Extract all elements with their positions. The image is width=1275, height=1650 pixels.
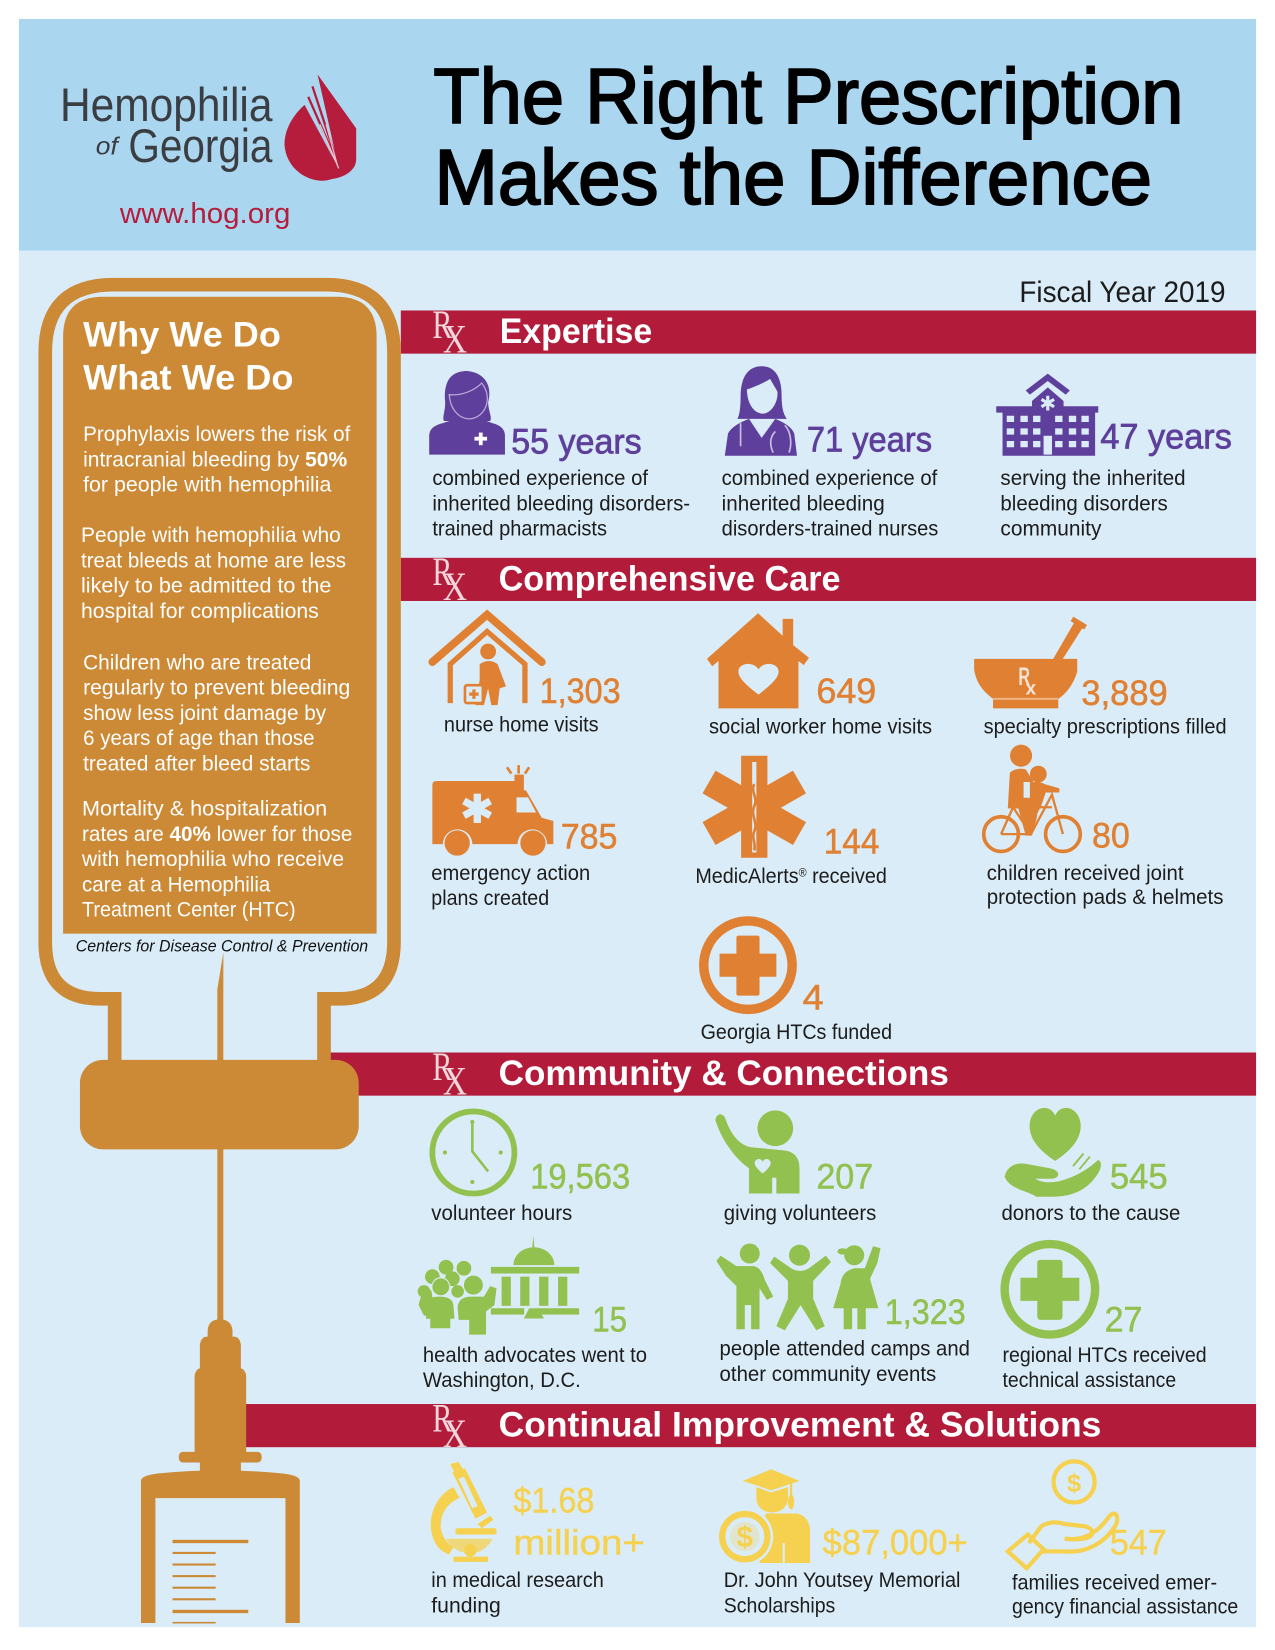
fact: mortality: with hemophilia who receive [81, 848, 344, 871]
section heading: Continual Improvement & Solutions: X [443, 1411, 467, 1456]
fact: prophylaxis: Prophylaxis lowers the risk of [83, 423, 350, 446]
description: volunteer hours [431, 1202, 572, 1225]
section heading: Expertise: Expertise [500, 313, 652, 351]
icon: hand receiving coin: $ [1067, 1469, 1081, 1497]
panel: community and connections [322, 1044, 1256, 1392]
fact: children: Children who are treated [83, 651, 311, 674]
description: social worker home visits [709, 716, 932, 739]
number: 27: 27 [1105, 1301, 1142, 1339]
stat: regional HTCs [1003, 1244, 1207, 1392]
description [431, 1569, 604, 1617]
icon: three children [716, 1244, 881, 1330]
title: Makes the Difference [434, 135, 1152, 221]
description: regional HTCs received [1003, 1344, 1207, 1367]
description: trained pharmacists [432, 518, 607, 541]
description: protection pads & helmets [987, 886, 1223, 909]
panel background [63, 297, 377, 934]
stat: medical research funding [431, 1462, 645, 1617]
description: Scholarships [724, 1594, 835, 1617]
number: $1.68 million+ [513, 1482, 645, 1563]
stat: memorial scholarships [716, 1469, 968, 1617]
description [987, 862, 1223, 909]
fact: mortality: rates are 40% lower for those [82, 823, 352, 846]
description: people attended camps and [720, 1338, 970, 1361]
stat: 71 years nurses [722, 366, 938, 541]
description: funding [431, 1594, 501, 1617]
description: combined experience of [722, 467, 937, 490]
icon: microscope [431, 1462, 497, 1562]
source credit: Centers for Disease Control & Prevention [76, 937, 368, 955]
section heading: Expertise: X [443, 317, 467, 362]
description: combined experience of [432, 467, 648, 490]
fact: mortality: Mortality & hospitalization [82, 798, 327, 821]
fact: children: 6 years of age than those [83, 727, 315, 750]
number: 15: 15 [592, 1301, 627, 1339]
icon: mortar and pestle [974, 619, 1086, 708]
icon: mortar and pestle: x [1026, 679, 1037, 700]
stat: nurse home visits [432, 615, 621, 736]
description: health advocates went to [423, 1344, 647, 1367]
section heading: Continual Improvement & Solutions: Continual Improvement & Solutions [499, 1407, 1101, 1445]
number: 71 years: 71 years [807, 422, 932, 460]
icon: medical cross in circle [704, 921, 792, 1009]
fact: prophylaxis: for people with hemophilia [83, 474, 332, 497]
description: inherited bleeding [722, 492, 885, 515]
description: serving the inherited [1000, 467, 1186, 490]
icon: nurse at home [432, 615, 542, 705]
syringe scale marks [173, 1540, 248, 1623]
icon: heart in hand [1005, 1108, 1101, 1197]
stat: joint protection pads and helmets [984, 745, 1223, 909]
stat: social worker home visits [707, 613, 932, 739]
icon: pharmacist [429, 371, 505, 455]
stat: camps and community events [716, 1244, 970, 1386]
section heading: Comprehensive Care [401, 549, 1256, 609]
panel: comprehensive care [401, 549, 1256, 1044]
description: disorders-trained nurses [722, 518, 938, 541]
description: technical assistance [1003, 1369, 1176, 1392]
description: donors to the cause [1001, 1202, 1180, 1225]
stat: specialty prescriptions [974, 619, 1227, 739]
panel: expertise [401, 302, 1256, 541]
number: $87,000+: $87,000+ [823, 1525, 968, 1563]
fiscal year label: Fiscal Year 2019 [1019, 276, 1226, 309]
description: Washington, D.C. [423, 1369, 581, 1392]
number: 547: 547 [1110, 1525, 1167, 1563]
logo: Hemophilia of Georgia: Georgia [128, 120, 273, 173]
description: ® [799, 868, 807, 880]
description: families received emer- [1012, 1571, 1217, 1594]
icon: volunteer raising hand [715, 1110, 800, 1194]
fact: children: show less joint damage by [83, 702, 327, 725]
stat: volunteer hours [431, 1111, 630, 1225]
number: 80: 80 [1092, 817, 1130, 855]
icon: clock [432, 1111, 514, 1194]
description [423, 1344, 647, 1392]
number: $1.68 million+: $1.68 [513, 1482, 594, 1520]
needle tube [217, 953, 223, 1321]
section heading: Expertise [401, 302, 1256, 362]
fact: children: treated after bleed starts [83, 752, 310, 775]
stat: Georgia HTCs funded [701, 921, 892, 1044]
logo: Hemophilia of Georgia: of [96, 133, 121, 161]
fact: prophylaxis [83, 423, 350, 497]
description: Georgia HTCs funded [701, 1021, 892, 1044]
section heading: Comprehensive Care: X [443, 564, 467, 609]
stat: giving volunteers [715, 1110, 876, 1225]
panel: continual improvement and solutions [242, 1395, 1256, 1618]
stat: donors to the cause [1001, 1108, 1180, 1225]
description [431, 862, 590, 910]
fact: home treatment: hospital for complications [81, 600, 319, 623]
icon: graduate with coin: $ [737, 1521, 753, 1554]
title: The Right Prescription [433, 54, 1183, 140]
number: $1.68 million+: million+ [513, 1525, 645, 1563]
IV bag outline [45, 285, 394, 1065]
description: community [1000, 518, 1102, 541]
description: plans created [431, 887, 549, 910]
fact: home treatment: likely to be admitted to the [81, 575, 331, 598]
icon: house with heart [707, 613, 809, 708]
description: children received joint [987, 862, 1184, 885]
section heading: Expertise: R [432, 302, 453, 347]
number: 785: 785 [561, 818, 618, 856]
description: Dr. John Youtsey Memorial [724, 1569, 960, 1592]
fact: children [83, 651, 350, 775]
number: 4: 4 [803, 979, 824, 1017]
number: 207: 207 [816, 1158, 873, 1196]
fact: home treatment [81, 524, 346, 623]
icon: mortar and pestle: R [1018, 663, 1030, 691]
icon: medical cross in circle [1005, 1244, 1095, 1335]
number: 3,889: 3,889 [1081, 675, 1168, 713]
description [1000, 467, 1186, 541]
panel: why we do what we do [63, 297, 377, 934]
description: gency financial assistance [1012, 1595, 1238, 1618]
section heading: Community & Connections: X [443, 1059, 467, 1104]
tube clamp [80, 1060, 359, 1149]
description: in medical research [431, 1569, 604, 1592]
fact: home treatment: treat bleeds at home are less [81, 549, 346, 572]
section heading: Continual Improvement & Solutions: R [432, 1395, 453, 1440]
fact: home treatment: People with hemophilia who [81, 524, 341, 547]
syringe [141, 1319, 300, 1623]
description [1003, 1344, 1207, 1392]
section heading: Comprehensive Care: R [432, 549, 453, 594]
panel heading: Why We Do [83, 316, 281, 354]
fact: prophylaxis: intracranial bleeding by 50% [83, 448, 347, 471]
number: 1,303: 1,303 [540, 673, 621, 711]
section heading: Community & Connections: Community & Connections [499, 1055, 949, 1093]
stat: health advocates [418, 1236, 647, 1392]
section heading: Community & Connections [322, 1044, 1256, 1104]
description [1012, 1571, 1238, 1618]
title [433, 54, 1183, 221]
section heading: Comprehensive Care: Comprehensive Care [499, 560, 841, 598]
section heading: Continual Improvement & Solutions [242, 1395, 1256, 1456]
description: nurse home visits [444, 713, 599, 736]
panel heading: What We Do [83, 359, 294, 397]
icon: star of life [709, 756, 800, 858]
number: 144: 144 [824, 824, 879, 862]
description [722, 467, 938, 541]
number: 55 years: 55 years [511, 424, 642, 462]
description [724, 1569, 960, 1617]
section heading: Community & Connections: R [432, 1044, 453, 1089]
icon: nurse [725, 366, 797, 456]
stat: emergency financial assistance [1008, 1461, 1238, 1618]
icon: hand receiving coin [1008, 1461, 1117, 1568]
number: 47 years: 47 years [1100, 418, 1232, 456]
description [720, 1338, 970, 1386]
description: bleeding disorders [1000, 492, 1168, 515]
logo: Hemophilia of Georgia: Hemophilia [60, 79, 273, 132]
stat: 55 years pharmacists [429, 371, 690, 541]
fact: mortality [81, 798, 352, 922]
description [432, 467, 690, 541]
panel heading [83, 316, 294, 397]
number: 1,323: 1,323 [885, 1294, 966, 1332]
fact: mortality: care at a Hemophilia [82, 873, 271, 896]
description: emergency action [431, 862, 590, 885]
icon: ambulance [432, 765, 553, 856]
header band [19, 19, 1256, 250]
logo: Hemophilia of Georgia [60, 75, 356, 181]
description: giving volunteers [724, 1202, 876, 1225]
stat: emergency action plans [431, 765, 618, 910]
icon: advocates and capitol building [418, 1236, 579, 1335]
fact: mortality: Treatment Center (HTC) [82, 899, 296, 922]
description: inherited bleeding disorders- [432, 492, 690, 515]
description: MedicAlerts [695, 865, 805, 888]
website link: www.hog.org [119, 198, 290, 230]
number: 649: 649 [816, 673, 876, 711]
IV bag, tube and syringe graphic [45, 285, 394, 1623]
stat: MedicAlerts received [695, 756, 887, 888]
description: specialty prescriptions filled [984, 716, 1227, 739]
description: other community events [720, 1363, 936, 1386]
stat: 47 years community [996, 374, 1232, 541]
icon: parent and child on bicycle [984, 745, 1080, 851]
description: received [807, 865, 887, 888]
icon: graduate with coin [716, 1469, 810, 1565]
number: 545: 545 [1110, 1158, 1168, 1196]
icon: hospital [996, 374, 1098, 456]
fact: children: regularly to prevent bleeding [83, 677, 350, 700]
number: 19,563: 19,563 [530, 1158, 630, 1196]
